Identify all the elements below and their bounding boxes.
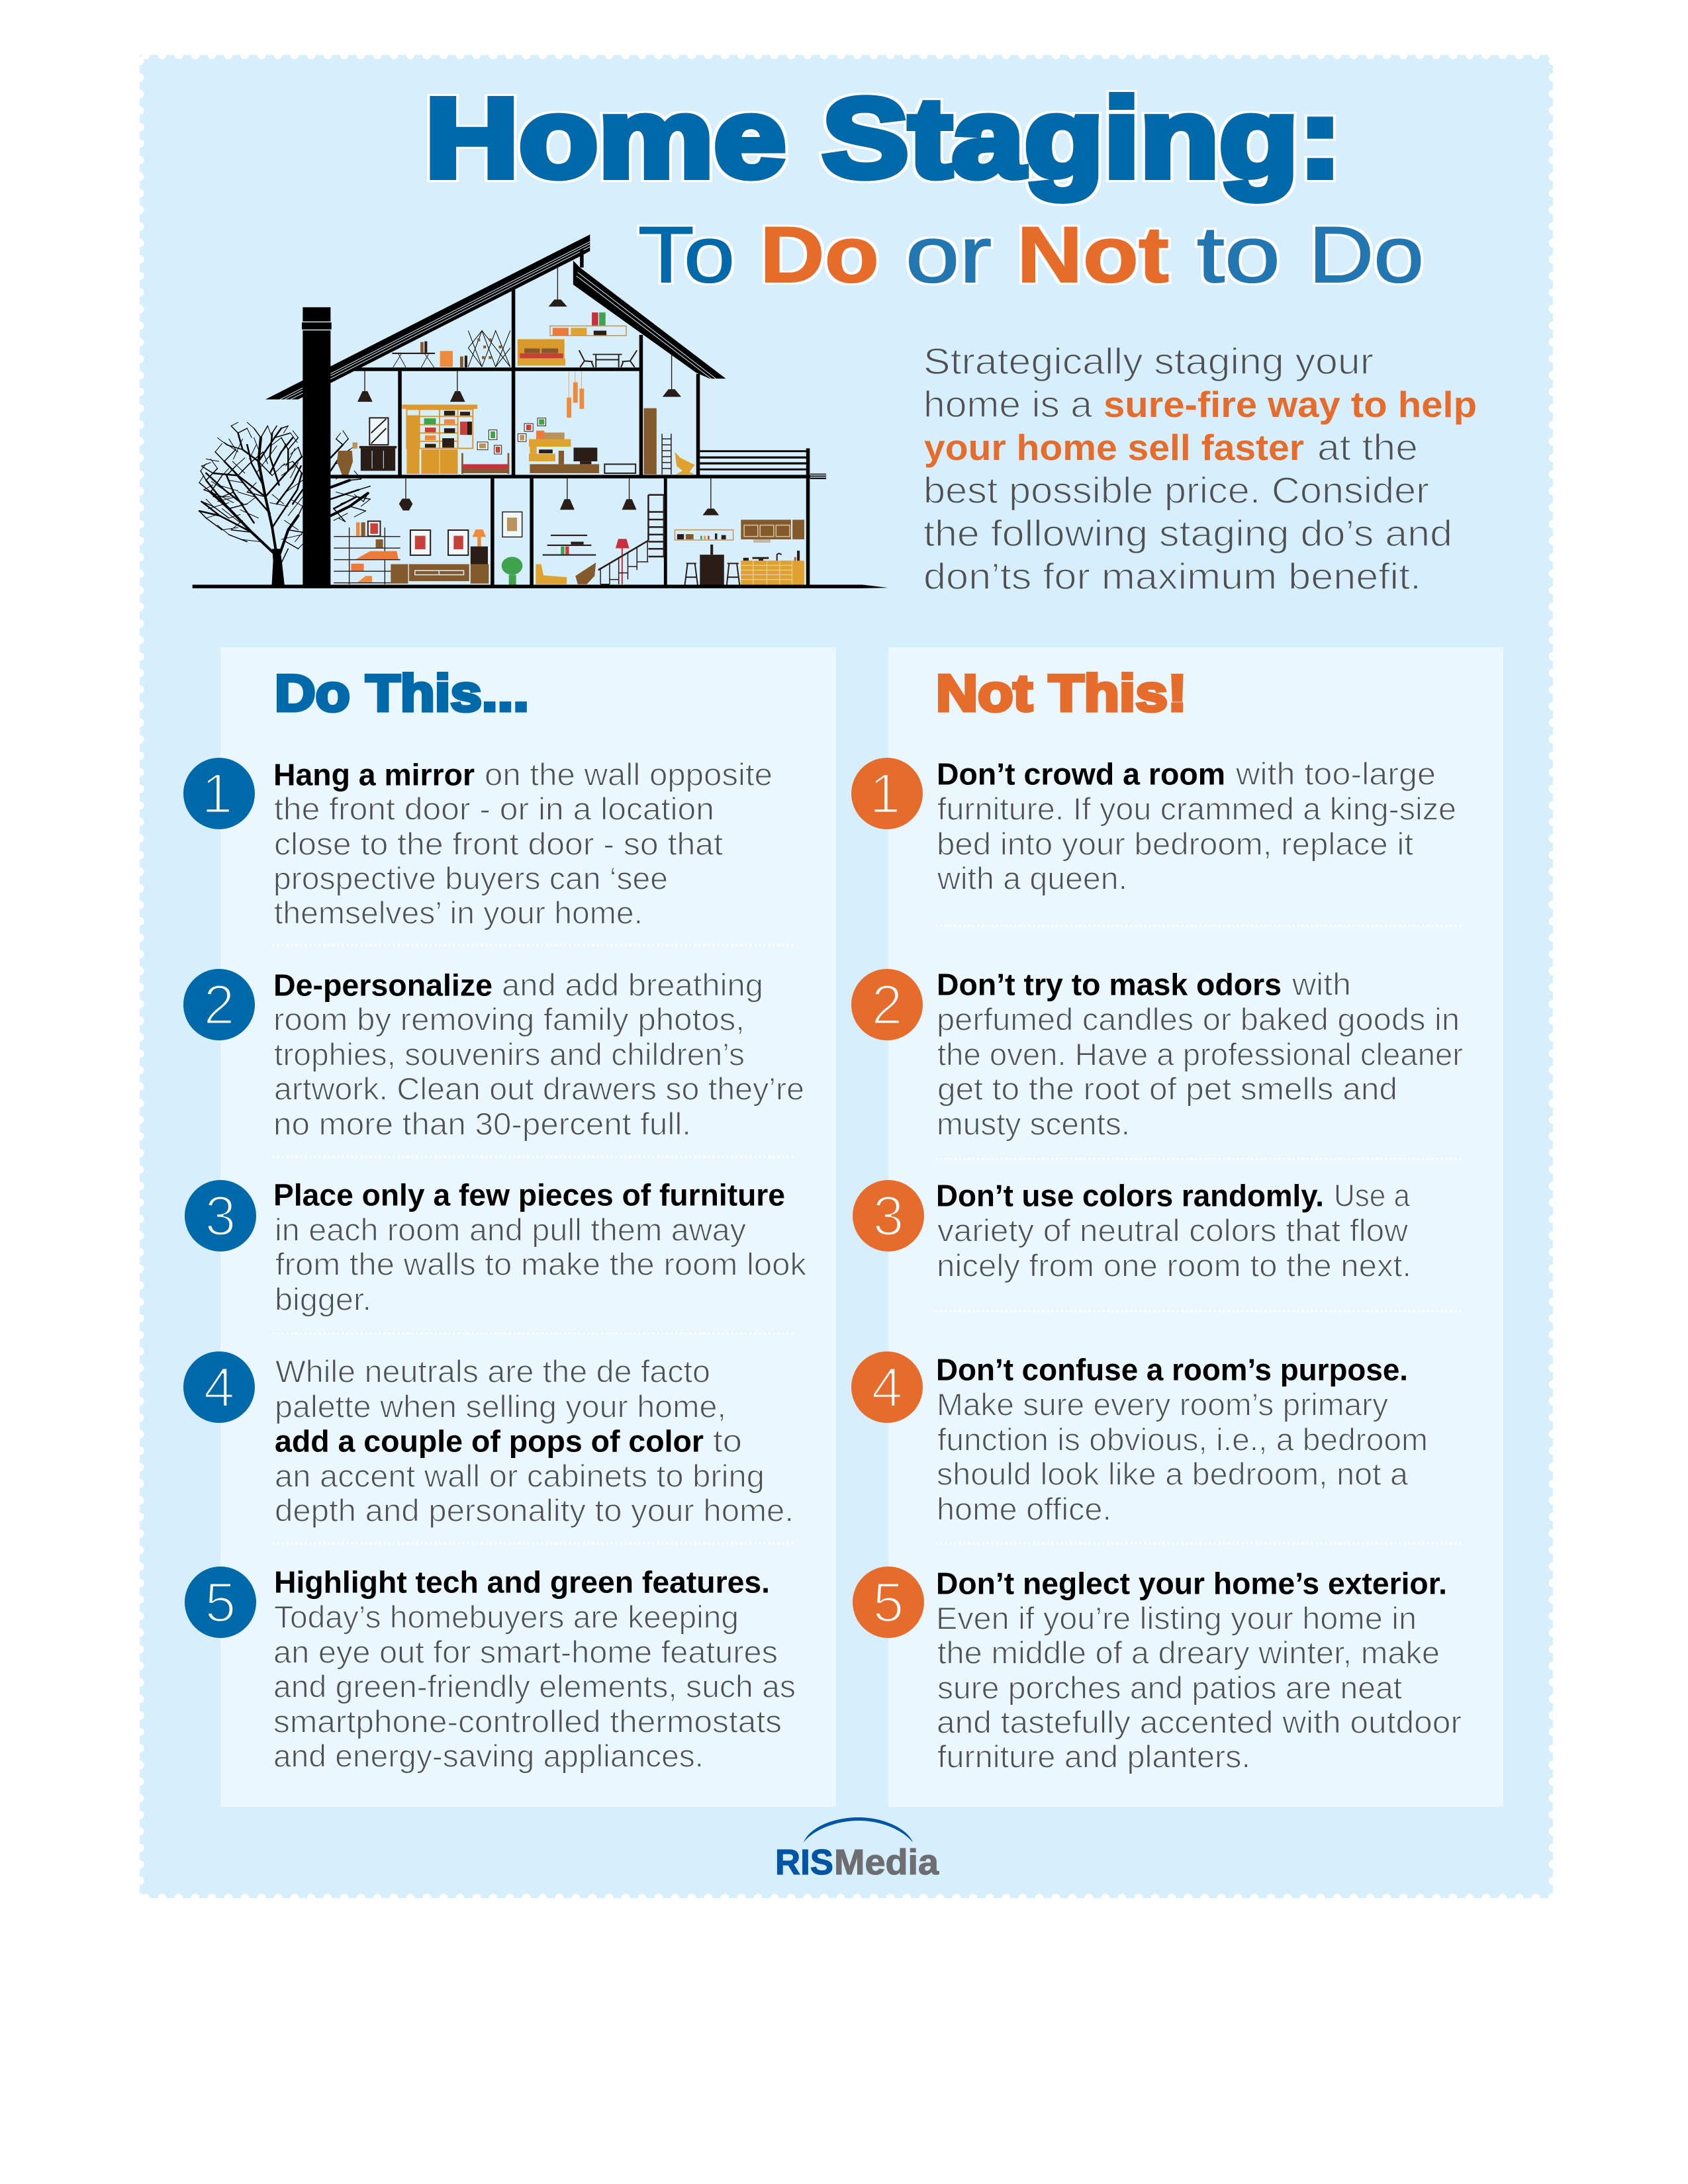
item 2: room by removing family photos, — [273, 1002, 745, 1036]
intro paragraph: the following staging do’s and — [923, 512, 1452, 554]
subtitle: To — [638, 210, 735, 299]
logo: RISMedia — [775, 1817, 939, 1882]
heading: Not This: Not This! — [936, 664, 1187, 722]
item 2 — [851, 966, 1463, 1141]
item 2: 2 — [872, 974, 902, 1036]
item 3: 3 — [205, 1185, 236, 1247]
panel: stamp-edged background card — [140, 55, 1553, 1898]
item 4: home office. — [937, 1492, 1111, 1526]
panel: Not This — [851, 647, 1503, 1807]
item 5: and energy-saving appliances. — [273, 1738, 704, 1774]
item 4: 4 — [872, 1356, 902, 1418]
item 1: themselves’ in your home. — [274, 895, 643, 931]
item 4: palette when selling your home, — [275, 1388, 726, 1424]
item 4: should look like a bedroom, not a — [937, 1456, 1409, 1492]
item 4: an accent wall or cabinets to bring — [275, 1459, 765, 1493]
item 4: While neutrals are the de facto — [275, 1354, 710, 1388]
item 1: with too-large — [1235, 756, 1436, 792]
item 3: nicely from one room to the next. — [937, 1248, 1411, 1283]
item 1: prospective buyers can ‘see — [273, 860, 668, 896]
intro paragraph: your home sell faster — [924, 427, 1304, 468]
item 1: with a queen. — [937, 860, 1127, 896]
item 5: furniture and planters. — [937, 1739, 1250, 1774]
divider lines — [273, 945, 796, 1543]
roof — [265, 234, 726, 400]
subtitle: to — [1197, 210, 1280, 299]
item 5: 5 — [873, 1571, 904, 1633]
item 5: an eye out for smart-home features — [273, 1635, 778, 1669]
item 5: smartphone-controlled thermostats — [273, 1704, 782, 1739]
item 1: Don’t crowd a room — [937, 757, 1225, 792]
item 3 — [853, 1178, 1411, 1283]
heading: Do This: Do This... — [275, 664, 529, 722]
intro paragraph: at the — [1317, 426, 1418, 468]
intro paragraph: Strategically staging your — [923, 340, 1374, 382]
illustration: house cross-section with tree — [193, 234, 888, 588]
item 1: bed into your bedroom, replace it — [937, 826, 1413, 862]
item 1: 1 — [202, 762, 232, 825]
ground — [193, 585, 888, 588]
item 3: from the walls to make the room look — [275, 1247, 807, 1281]
panel: Do This — [183, 647, 836, 1807]
item 4: depth and personality to your home. — [275, 1493, 794, 1527]
item 2: perfumed candles or baked goods in — [937, 1002, 1460, 1036]
item 2: get to the root of pet smells and — [937, 1071, 1397, 1107]
item 4: to — [713, 1423, 742, 1459]
item 5: Today’s homebuyers are keeping — [274, 1599, 739, 1635]
item 1: Hang a mirror — [273, 757, 475, 792]
item 5: sure porches and patios are neat — [937, 1670, 1402, 1705]
item 4: Make sure every room’s primary — [937, 1387, 1389, 1422]
house walls and floors — [330, 289, 826, 586]
item 5: and green-friendly elements, such as — [273, 1669, 796, 1704]
item 4 — [183, 1351, 794, 1527]
subtitle: Not — [1017, 210, 1169, 299]
subtitle: Do — [760, 210, 879, 299]
item 5: the middle of a dreary winter, make — [937, 1635, 1440, 1670]
item 1: close to the front door - so that — [274, 826, 723, 862]
lower floor furniture — [334, 495, 804, 585]
item 3: bigger. — [275, 1281, 371, 1317]
orange pendants — [567, 371, 584, 418]
item 2: trophies, souvenirs and children’s — [274, 1036, 745, 1072]
item 5: Even if you’re listing your home in — [936, 1600, 1417, 1636]
item 1: furniture. If you crammed a king-size — [937, 792, 1456, 826]
item 2: musty scents. — [937, 1107, 1130, 1141]
pendant lamps — [357, 266, 719, 516]
item 5: Don’t neglect your home’s exterior. — [936, 1566, 1447, 1600]
item 3: Place only a few pieces of furniture — [273, 1178, 785, 1212]
item 3: Use a — [1334, 1178, 1411, 1212]
item 5: Highlight tech and green features. — [274, 1565, 770, 1599]
item 3 — [185, 1178, 807, 1317]
intro paragraph: best possible price. Consider — [923, 469, 1429, 511]
item 5: and tastefully accented with outdoor — [937, 1705, 1462, 1739]
intro paragraph: home is a — [923, 383, 1093, 425]
subtitle: Do — [1309, 210, 1424, 299]
item 2: and add breathing — [502, 968, 763, 1002]
subtitle: or — [906, 210, 992, 299]
title: Home Staging: — [425, 75, 1342, 201]
item 2: no more than 30-percent full. — [273, 1107, 691, 1141]
chimney — [302, 307, 332, 588]
item 1: 1 — [870, 762, 900, 825]
item 5 — [853, 1566, 1462, 1774]
intro paragraph — [923, 340, 1477, 597]
item 2: with — [1291, 966, 1351, 1002]
item 2: De-personalize — [273, 968, 492, 1002]
divider lines — [937, 926, 1461, 1543]
item 2: Don’t try to mask odors — [937, 968, 1282, 1002]
middle floor furniture — [337, 404, 695, 475]
logo: RISMedia: Media — [834, 1843, 939, 1882]
item 5: 5 — [205, 1571, 236, 1633]
item 3: Don’t use colors randomly. — [936, 1178, 1324, 1212]
item 2: 2 — [204, 974, 234, 1036]
item 1 — [183, 757, 773, 931]
item 2 — [183, 968, 804, 1141]
attic furniture — [392, 312, 637, 367]
item 2: the oven. Have a professional cleaner — [937, 1036, 1463, 1072]
item 4 — [851, 1351, 1428, 1526]
item 1 — [851, 756, 1456, 896]
item 2: artwork. Clean out drawers so they’re — [274, 1071, 804, 1107]
item 1: on the wall opposite — [485, 757, 773, 792]
intro paragraph: sure-fire way to help — [1103, 384, 1477, 425]
item 3: in each room and pull them away — [275, 1212, 747, 1247]
item 4: Don’t confuse a room’s purpose. — [936, 1353, 1408, 1387]
icon: bare tree — [199, 422, 370, 585]
logo: RISMedia: RIS — [775, 1843, 833, 1882]
intro paragraph: don’ts for maximum benefit. — [923, 555, 1421, 597]
subtitle — [638, 210, 1424, 299]
item 3: 3 — [873, 1185, 904, 1247]
item 5 — [185, 1565, 796, 1774]
item 4: add a couple of pops of color — [275, 1424, 704, 1459]
item 4: 4 — [204, 1356, 234, 1418]
item 4: function is obvious, i.e., a bedroom — [937, 1422, 1428, 1457]
item 1: the front door - or in a location — [274, 792, 714, 826]
item 3: variety of neutral colors that flow — [937, 1212, 1409, 1248]
